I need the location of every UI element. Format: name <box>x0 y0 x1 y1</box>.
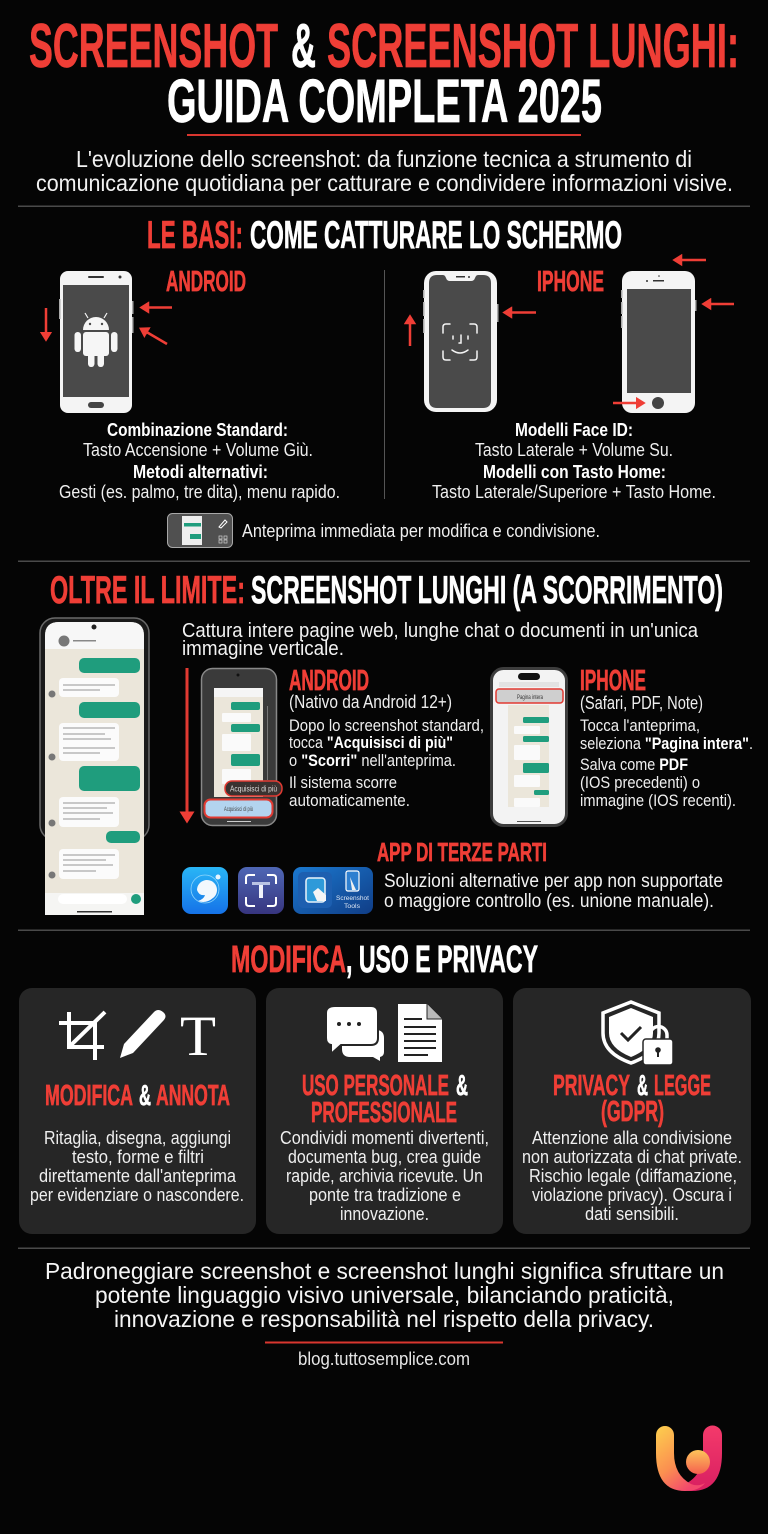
android instructions: Gesti (es. palmo, tre dita), menu rapido. <box>59 482 340 502</box>
long screenshot intro: Cattura intere pagine web, lunghe chat o documenti in un'unica <box>182 620 699 642</box>
card text <box>280 1128 489 1224</box>
heading: modifica uso privacy: MODIFICA <box>231 939 346 981</box>
icon: padlock <box>643 1026 673 1065</box>
card text: per evidenziare o nascondere. <box>30 1185 244 1205</box>
card heading <box>302 1070 468 1129</box>
android scroll text <box>289 665 484 810</box>
card text: non autorizzata di chat private. <box>522 1147 742 1167</box>
illustration: iphone full page capture: Pagina intera <box>517 695 543 701</box>
iphone instructions: Tasto Laterale + Volume Su. <box>475 440 673 460</box>
iphone scroll text: seleziona "Pagina intera". <box>580 734 753 753</box>
panel: android basics <box>46 266 340 502</box>
source url: blog.tuttosemplice.com <box>298 1349 470 1369</box>
card heading: & <box>456 1070 468 1102</box>
card heading <box>553 1070 711 1128</box>
icon: app three <box>293 867 373 914</box>
arrow: home button <box>613 402 637 404</box>
callout: bubble <box>225 781 282 796</box>
icon: home button iphone <box>621 271 696 413</box>
android scroll text: (Nativo da Android 12+) <box>289 692 452 712</box>
panel: modifica e annota <box>19 988 256 1234</box>
card heading: LEGGE <box>654 1070 711 1102</box>
heading: le basi <box>147 214 622 257</box>
arrow: side button <box>511 311 536 314</box>
android label: ANDROID <box>166 266 246 298</box>
illustration: android scroll capture <box>202 668 282 826</box>
iphone instructions: Modelli Face ID: <box>515 420 633 440</box>
icon: preview thumbnail <box>168 514 232 548</box>
card text: Attenzione alla condivisione <box>532 1128 732 1148</box>
card text <box>30 1128 244 1205</box>
android instructions <box>59 420 340 502</box>
arrow: side button 2 <box>710 303 734 305</box>
card heading: & <box>637 1070 648 1102</box>
card text: rapide, archivia ricevute. Un <box>286 1166 483 1186</box>
android instructions: Metodi alternativi: <box>133 462 268 482</box>
iphone label: IPHONE <box>537 266 604 298</box>
card text: violazione privacy). Oscura i <box>532 1185 732 1205</box>
chat bubbles <box>48 658 140 879</box>
callout: bubble: Acquisisci di più <box>230 784 277 794</box>
android scroll text: Il sistema scorre <box>289 773 397 792</box>
icon: face id iphone <box>423 271 498 412</box>
icon: pencil <box>120 1010 166 1058</box>
card text: Condividi momenti divertenti, <box>280 1128 489 1148</box>
iphone instructions <box>432 420 716 502</box>
third party apps text: o maggiore controllo (es. unione manuale). <box>384 891 714 912</box>
icon: face id <box>443 324 477 360</box>
card heading: USO PERSONALE <box>302 1070 449 1102</box>
panel: privacy e legge <box>513 988 751 1234</box>
title: & <box>291 12 316 81</box>
arrow: power <box>148 306 172 309</box>
iphone scroll text: IPHONE <box>580 665 646 697</box>
icon: android robot <box>74 313 118 367</box>
iphone scroll text: (Safari, PDF, Note) <box>580 693 703 713</box>
conclusion: potente linguaggio visivo universale, bilanciando praticità, <box>95 1282 674 1308</box>
logo <box>656 1426 722 1491</box>
android scroll text: automaticamente. <box>289 791 410 810</box>
panel: uso personale e professionale <box>266 988 503 1234</box>
preview caption: Anteprima immediata per modifica e condivisione. <box>242 521 600 541</box>
card text: dati sensibili. <box>585 1204 679 1224</box>
long screenshot intro <box>182 620 699 660</box>
card heading: MODIFICA <box>45 1080 133 1112</box>
arrow: top button <box>681 259 706 261</box>
card text: Rischio legale (diffamazione, <box>529 1166 737 1186</box>
icon: app one <box>182 867 228 914</box>
conclusion <box>45 1258 724 1332</box>
iphone scroll text: immagine (IOS recenti). <box>580 791 736 810</box>
card heading: (GDPR) <box>601 1096 664 1128</box>
iphone instructions: Tasto Laterale/Superiore + Tasto Home. <box>432 482 716 502</box>
android scroll text: tocca "Acquisisci di più" <box>289 733 453 752</box>
third party apps text: Soluzioni alternative per app non supportate <box>384 871 723 892</box>
android scroll text: o "Scorri" nell'anteprima. <box>289 751 456 770</box>
card text: direttamente dall'anteprima <box>39 1166 237 1186</box>
iphone scroll text: (IOS precedenti) o <box>580 773 700 792</box>
android instructions: Tasto Accensione + Volume Giù. <box>83 440 313 460</box>
card text: documenta bug, crea guide <box>288 1147 481 1167</box>
callout: button: Acquisisci di più <box>224 807 253 813</box>
arrow: volume up <box>409 323 411 346</box>
arrow: volume <box>146 332 167 344</box>
card text: testo, forme e filtri <box>72 1147 204 1167</box>
subtitle: L'evoluzione dello screenshot: da funzione tecnica a strumento di <box>76 146 692 172</box>
iphone instructions: Modelli con Tasto Home: <box>483 462 666 482</box>
arrow: scroll down <box>186 668 188 813</box>
long screenshot intro: immagine verticale. <box>182 638 344 660</box>
icon: android phone <box>59 271 134 413</box>
iphone scroll text: Salva come PDF <box>580 755 688 774</box>
icon: text T: T <box>180 1005 216 1068</box>
illustration: iphone full page capture <box>492 668 566 826</box>
heading: oltre il limite: OLTRE IL LIMITE: <box>50 569 245 612</box>
icon: shield <box>603 1002 659 1063</box>
conclusion: Padroneggiare screenshot e screenshot lunghi significa sfruttare un <box>45 1258 724 1284</box>
card text: ponte tra tradizione e <box>309 1185 461 1205</box>
third party apps heading: APP DI TERZE PARTI <box>377 837 547 867</box>
illustration: long screenshot phone <box>40 618 149 915</box>
third party apps text <box>384 871 723 912</box>
card heading: & <box>139 1080 151 1112</box>
subtitle: comunicazione quotidiana per catturare e condividere informazioni visive. <box>36 170 733 196</box>
heading: modifica uso privacy <box>231 939 538 981</box>
card text <box>522 1128 742 1224</box>
android instructions: Combinazione Standard: <box>107 420 288 440</box>
title: SCREENSHOT <box>29 12 278 81</box>
icon: app three: Screenshot <box>336 896 369 902</box>
icon: speech bubbles <box>326 1006 384 1061</box>
card heading: PRIVACY <box>553 1070 630 1102</box>
card text: innovazione. <box>340 1204 429 1224</box>
card heading: PROFESSIONALE <box>311 1097 457 1129</box>
card heading: ANNOTA <box>156 1080 230 1112</box>
heading: le basi: LE BASI: <box>147 214 243 257</box>
subtitle <box>36 146 733 196</box>
android scroll text: Dopo lo screenshot standard, <box>289 716 484 735</box>
icon: app two <box>238 867 284 914</box>
callout: button <box>204 800 272 818</box>
icon: document <box>398 1004 442 1062</box>
iphone scroll text: Tocca l'anteprima, <box>580 716 700 735</box>
heading: modifica uso privacy: , USO E PRIVACY <box>346 939 538 981</box>
iphone scroll text <box>580 665 753 810</box>
title <box>29 12 739 135</box>
panel: iphone basics <box>410 260 734 502</box>
conclusion: innovazione e responsabilità nel rispetto della privacy. <box>114 1306 654 1332</box>
android scroll text: ANDROID <box>289 665 369 697</box>
heading: oltre il limite <box>50 569 723 612</box>
card text: Ritaglia, disegna, aggiungi <box>44 1128 231 1148</box>
icon: app three: Tools <box>344 904 360 910</box>
arrow: down <box>45 308 47 333</box>
icon: crop <box>59 1012 105 1060</box>
